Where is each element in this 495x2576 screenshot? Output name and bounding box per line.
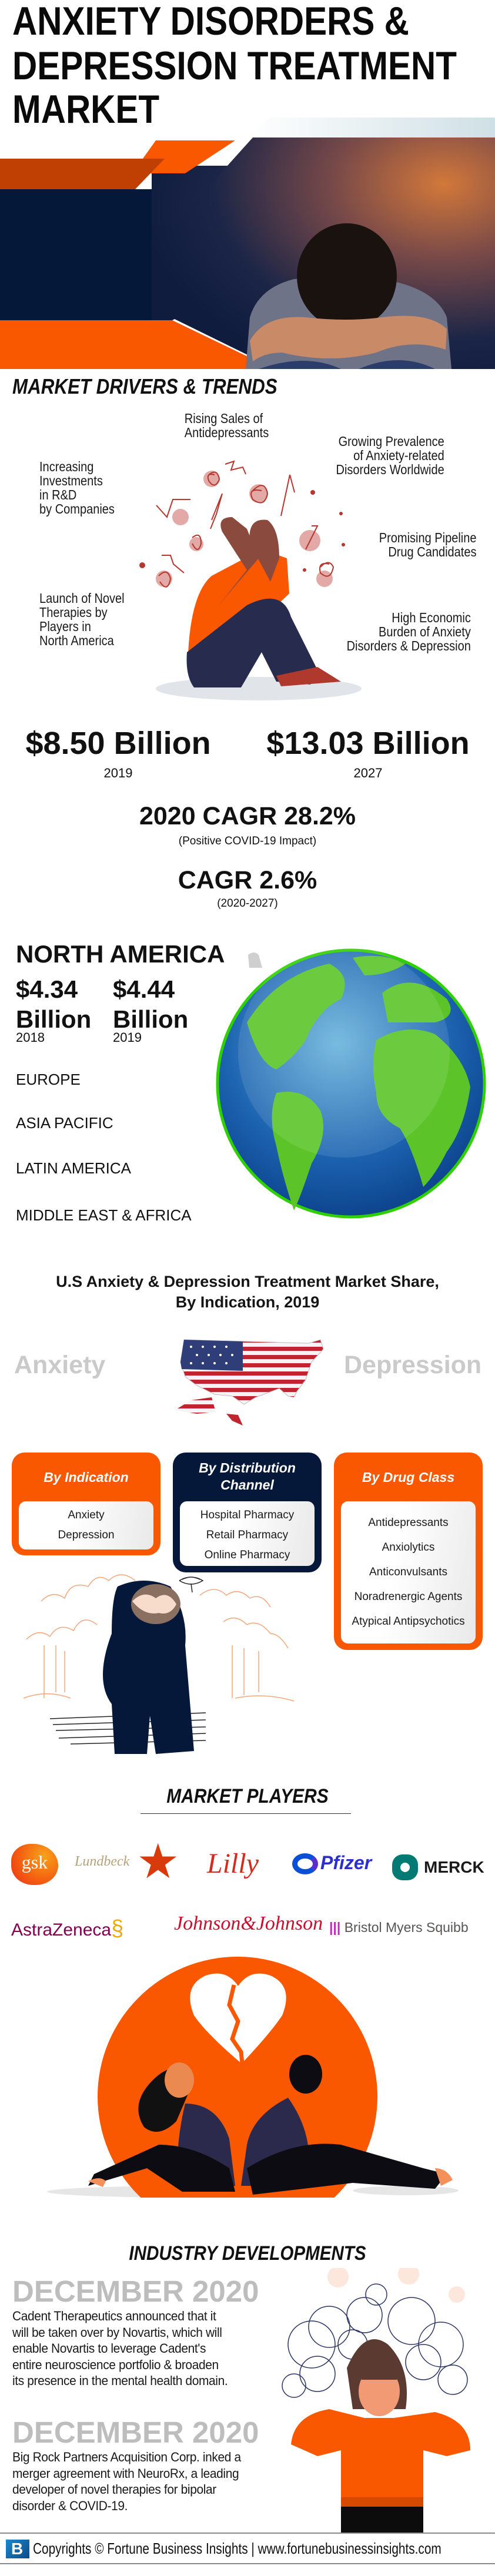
footer text: Copyrights © Fortune Business Insights | www.fortunebusinessinsights.com <box>33 2540 442 2557</box>
logo: merck: MERCK <box>424 1858 484 1876</box>
heading: market drivers & trends: MARKET DRIVERS & TRENDS <box>12 374 277 398</box>
region: north america: $4.44 <box>113 975 175 1003</box>
driver: pipeline: Drug Candidates <box>388 544 476 559</box>
region: north america: Billion <box>16 1005 91 1033</box>
panel: by drug class: Noradrenergic Agents <box>354 1591 462 1603</box>
panel: by drug class: Atypical Antipsychotics <box>352 1615 465 1628</box>
driver: novel therapies: Launch of Novel <box>39 591 125 606</box>
driver: rising sales <box>185 411 269 440</box>
title <box>12 0 457 132</box>
stat: 2020 CAGR: 2020 CAGR 28.2% <box>139 802 356 830</box>
development 2 <box>12 2416 259 2513</box>
hero banner with photo <box>0 118 495 369</box>
panel: by drug class: Anxiolytics <box>382 1541 434 1554</box>
development 1: its presence in the mental health domain. <box>12 2373 228 2388</box>
development 1 <box>12 2275 259 2388</box>
development 2: developer of novel therapies for bipolar <box>12 2482 216 2497</box>
person <box>246 276 451 369</box>
panel: by distribution channel: Channel <box>220 1477 274 1492</box>
panel: by distribution channel: By Distribution <box>199 1460 296 1475</box>
region: north america <box>16 940 225 1045</box>
development 1: DECEMBER 2020 <box>12 2275 259 2308</box>
logo: lundbeck: Lundbeck <box>75 1854 129 1869</box>
logo: merck <box>392 1854 484 1880</box>
region: north america: Billion <box>113 1005 188 1033</box>
US flag map <box>175 1340 323 1425</box>
region list: MIDDLE EAST & AFRICA <box>16 1206 192 1224</box>
stat: 2027 value: $13.03 Billion <box>266 726 470 761</box>
heading: US market share <box>56 1273 439 1311</box>
stat: 2027 label: 2027 <box>354 766 382 780</box>
driver: pipeline <box>379 530 476 559</box>
driver: investments <box>39 459 115 516</box>
panel: by indication <box>12 1453 160 1555</box>
driver: growing prevalence: Growing Prevalence <box>339 434 444 449</box>
driver: novel therapies: Therapies by <box>39 605 108 620</box>
logo: gsk <box>11 1844 58 1885</box>
driver: pipeline: Promising Pipeline <box>379 530 476 545</box>
driver: growing prevalence <box>336 434 444 477</box>
logo: bristol myers squibb: ||| Bristol Myers Squibb <box>329 1920 469 1935</box>
panel: by drug class: Anticonvulsants <box>369 1566 447 1578</box>
development 2: merger agreement with NeuroRx, a leading <box>12 2466 239 2481</box>
driver: rising sales: Antidepressants <box>185 425 269 440</box>
stat: CAGR 2.6: CAGR 2.6% <box>178 866 317 894</box>
label: depression: Depression <box>344 1351 481 1379</box>
logo: johnson & johnson: Johnson&Johnson <box>174 1913 323 1934</box>
panel: by distribution channel: Retail Pharmacy <box>206 1529 288 1541</box>
logo: star: ★ <box>136 1835 180 1889</box>
driver: economic burden: Disorders & Depression <box>347 638 471 653</box>
heading: US market share: U.S Anxiety & Depression Treatment Market Share, <box>56 1273 439 1290</box>
stat: covid note: (Positive COVID-19 Impact) <box>179 835 316 847</box>
development 1: enable Novartis to leverage Cadent's <box>12 2341 206 2356</box>
logo: pfizer: Pfizer <box>320 1852 372 1873</box>
region: north america: $4.34 <box>16 975 78 1003</box>
driver: growing prevalence: Disorders Worldwide <box>336 462 444 477</box>
panel: by indication: By Indication <box>44 1470 129 1485</box>
title: DEPRESSION TREATMENT <box>12 43 457 88</box>
logos row 2 <box>11 1913 469 1941</box>
stat: period: (2020-2027) <box>217 897 278 910</box>
driver: investments: in R&D <box>39 487 76 502</box>
stat: 2019 label: 2019 <box>104 766 132 780</box>
region: north america: 2019 <box>113 1030 142 1045</box>
driver: investments: Increasing <box>39 459 93 474</box>
development 2: DECEMBER 2020 <box>12 2416 259 2449</box>
development 1: Cadent Therapeutics announced that it <box>12 2309 216 2323</box>
region: north america: NORTH AMERICA <box>16 940 225 968</box>
logo: astrazeneca: AstraZeneca§ <box>11 1916 123 1941</box>
driver: growing prevalence: of Anxiety-related <box>353 448 444 463</box>
footer <box>0 2533 495 2564</box>
region list: ASIA PACIFIC <box>16 1114 113 1132</box>
region list: EUROPE <box>16 1071 81 1088</box>
illustration: anxious sitting person <box>139 460 362 700</box>
logo: lilly: Lilly <box>207 1848 259 1879</box>
icon: fbi logo <box>6 2540 29 2558</box>
icon: fbi logo: B <box>11 2540 23 2558</box>
panel: by drug class: Antidepressants <box>368 1517 449 1529</box>
panel: by drug class <box>334 1453 483 1650</box>
globe <box>216 948 486 1219</box>
driver: novel therapies: North America <box>39 633 114 648</box>
heading: industry developments: INDUSTRY DEVELOPMENTS <box>129 2242 366 2265</box>
panel: by distribution channel: Hospital Pharmacy <box>200 1509 294 1521</box>
driver: investments: by Companies <box>39 501 115 516</box>
development 2: disorder & COVID-19. <box>12 2498 128 2513</box>
driver: novel therapies <box>39 591 125 648</box>
panel: by indication: Anxiety <box>68 1509 105 1521</box>
driver: economic burden: Burden of Anxiety <box>379 624 471 639</box>
title: MARKET <box>12 87 159 132</box>
panel: by distribution channel: Online Pharmacy <box>205 1549 290 1561</box>
heading: US market share: By Indication, 2019 <box>176 1293 319 1311</box>
panel: by drug class: By Drug Class <box>362 1470 454 1485</box>
label: anxiety: Anxiety <box>14 1351 105 1379</box>
driver: economic burden <box>347 610 471 653</box>
panel: by distribution channel <box>173 1453 322 1572</box>
stat: 2019 value: $8.50 Billion <box>25 726 211 761</box>
development 2: Big Rock Partners Acquisition Corp. inked a <box>12 2450 241 2464</box>
region: north america: 2018 <box>16 1030 45 1045</box>
heading: market players: MARKET PLAYERS <box>166 1785 329 1807</box>
illustration: stressed man on bench <box>24 1574 294 1754</box>
driver: investments: Investments <box>39 473 103 488</box>
panel: by indication: Depression <box>58 1529 115 1541</box>
logo: gsk: gsk <box>22 1852 48 1873</box>
logos row 1 <box>11 1835 484 1889</box>
development 1: entire neuroscience portfolio & broaden <box>12 2357 219 2372</box>
driver: economic burden: High Economic <box>392 610 471 625</box>
driver: rising sales: Rising Sales of <box>185 411 263 426</box>
region list <box>16 1071 192 1224</box>
region list: LATIN AMERICA <box>16 1159 131 1177</box>
development 1: will be taken over by Novartis, which will <box>12 2325 222 2340</box>
driver: novel therapies: Players in <box>39 619 91 634</box>
illustration: stressed woman <box>282 2268 470 2533</box>
illustration: heartbroken couple <box>47 1957 459 2198</box>
logo: pfizer <box>292 1852 373 1874</box>
title: ANXIETY DISORDERS & <box>12 0 409 43</box>
